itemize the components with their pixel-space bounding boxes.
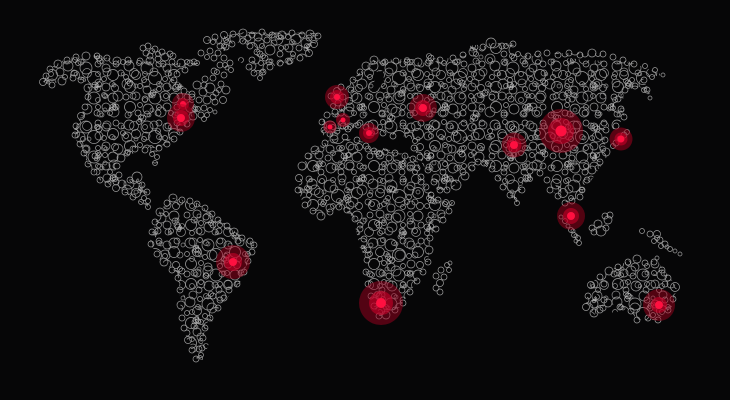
bright clustered circle layer over land (43, 33, 677, 360)
hotspot: Brazil (216, 245, 250, 279)
hotspot: India (502, 132, 526, 158)
Australia (585, 260, 677, 320)
Greenland (207, 32, 320, 78)
North America (43, 55, 200, 207)
edge circles: Eurasia and Britain (319, 38, 665, 206)
edge circles: North America (40, 52, 200, 210)
hotspot: US east (167, 104, 195, 132)
hotspot: South Africa (359, 281, 403, 325)
hotspot: Spain (324, 120, 336, 134)
Africa (298, 138, 453, 317)
South America (150, 198, 255, 360)
hotspot: Russia (409, 94, 437, 122)
sea gaps (374, 71, 417, 147)
edge circles: South America (148, 194, 257, 362)
hotspot: Italy (336, 113, 350, 127)
Eurasia (322, 43, 663, 203)
hotspot: Japan (610, 128, 632, 150)
edge circles: Australia (582, 255, 680, 323)
hotspot: Australia (643, 289, 675, 321)
hotspot: Britain (325, 85, 349, 109)
islands: Japan, Sumatra, Borneo, New Guinea (559, 130, 682, 256)
edge circles: Greenland (204, 29, 321, 80)
hotspot: Southeast Asia (557, 202, 585, 230)
edge circles: Africa and Madagascar (295, 134, 454, 319)
hotspot: US northeast (172, 93, 194, 115)
islands: Arctic, Baffin, Labrador, Newfoundland (140, 43, 234, 122)
hotspots (167, 85, 675, 325)
world map land masses (40, 29, 682, 362)
hotspot: Turkey (359, 123, 379, 143)
hotspot: China (539, 109, 583, 153)
denser circle layer over land (43, 32, 677, 360)
